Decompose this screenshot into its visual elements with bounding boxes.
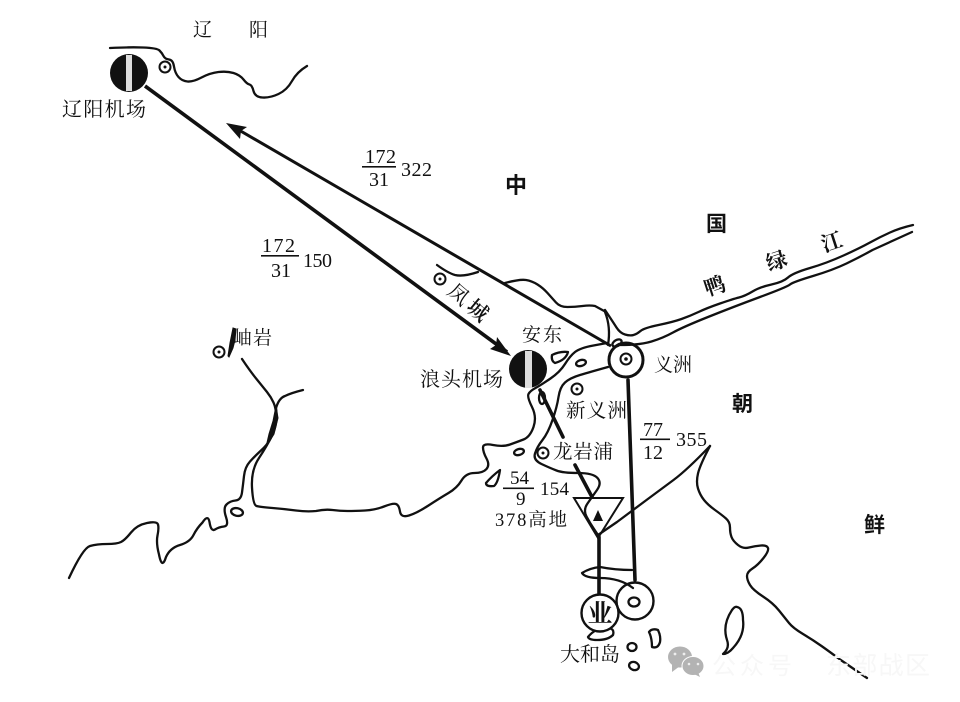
icon: island target: 业 xyxy=(587,600,613,628)
river: Liaoyang xyxy=(110,47,307,98)
label: China 国: 国 xyxy=(706,213,727,236)
label: sortie 172/31 322 xyxy=(362,146,432,191)
label: Korea 朝: 朝 xyxy=(732,393,753,416)
route: river mouth to Longyanpu xyxy=(540,390,563,437)
icon: Liaoyang airport xyxy=(110,54,148,92)
label: sortie 172/31 322: 322 xyxy=(401,159,432,181)
label: sortie 77/12 355: 77 xyxy=(643,419,663,441)
islands xyxy=(486,338,743,671)
river: Xiuyan branch and estuary xyxy=(69,359,303,578)
label: Yalu river: 江 xyxy=(818,228,846,257)
label: Langtou airport: 浪头机场 xyxy=(420,368,503,391)
icon: island target xyxy=(582,594,618,632)
label: Xiuyan: 岫岩 xyxy=(233,327,272,349)
label: Yalu river: 鸭 xyxy=(701,272,729,301)
icon: Yizhou target xyxy=(609,343,643,377)
label: sortie 172/31 150: 172 xyxy=(262,235,295,257)
label: sortie 77/12 355: 355 xyxy=(676,429,707,451)
route: Yizhou to island xyxy=(628,380,635,580)
label: China 中: 中 xyxy=(505,173,527,198)
label: Liaoyang: 辽 xyxy=(193,19,212,41)
label: sortie 172/31 150: 150 xyxy=(303,250,332,272)
icon: Liaoyang city xyxy=(160,62,170,72)
label: Fengcheng: 城 xyxy=(462,295,493,327)
label: Liaoyang: 阳 xyxy=(249,19,268,41)
label: Xiuyan xyxy=(228,327,272,357)
route: Langtou to Liaoyang with arrow xyxy=(226,123,611,346)
label: Korea 鲜: 鲜 xyxy=(864,514,885,537)
icon: Xinyizhou city xyxy=(572,384,582,394)
coastline: west of Yalu mouth xyxy=(252,343,607,516)
label: sortie 172/31 150 xyxy=(261,235,332,282)
watermark xyxy=(668,646,930,680)
icon: Langtou airport xyxy=(509,350,547,388)
icon: chat bubbles xyxy=(668,646,704,677)
label: Liaoyang airport: 辽阳机场 xyxy=(62,98,146,121)
Yalu river xyxy=(605,225,913,345)
label: Longyanpu: 龙岩浦 xyxy=(553,441,613,463)
label: sortie 172/31 322: 172 xyxy=(365,146,396,168)
label: Hill 378: 378高地 xyxy=(495,510,567,531)
label: Andong: 安东 xyxy=(522,324,562,346)
label: sortie 172/31 150: 31 xyxy=(271,260,291,282)
icon: Xiuyan city xyxy=(214,346,224,358)
coastline: Korea west coast xyxy=(697,446,867,678)
label: sortie 54/9 154: 54 xyxy=(510,468,530,489)
watermark: 东部战区 xyxy=(826,652,930,680)
icon: island circle xyxy=(616,582,654,620)
label: sortie 77/12 355: 12 xyxy=(643,442,663,464)
icon: Longyanpu city xyxy=(538,448,548,458)
label: Xinyizhou: 新义洲 xyxy=(566,400,627,422)
label: Yalu river: 绿 xyxy=(763,247,791,276)
river: Fengcheng tributary xyxy=(437,265,609,345)
coastline: east bank of the Yalu mouth xyxy=(535,367,710,535)
icon: 378 height triangle xyxy=(574,498,623,538)
route: triangle to island xyxy=(597,537,601,595)
label: sortie 172/31 322: 31 xyxy=(369,169,389,191)
label: Fengcheng xyxy=(443,279,493,327)
label: Yalu river xyxy=(701,228,846,301)
route: Longyanpu to triangle xyxy=(575,465,592,497)
route: Liaoyang to Langtou with arrow xyxy=(145,86,511,356)
label: Yizhou: 义洲 xyxy=(654,354,692,376)
label: sortie 54/9 154 xyxy=(503,468,570,510)
label: sortie 54/9 154: 9 xyxy=(516,489,526,510)
label: Dahe island: 大和岛 xyxy=(560,643,620,666)
watermark: 公众号 xyxy=(712,653,792,680)
label: Fengcheng: 凤 xyxy=(443,279,474,311)
label: Liaoyang xyxy=(193,19,268,41)
label: sortie 54/9 154: 154 xyxy=(540,479,570,500)
label: sortie 77/12 355 xyxy=(640,419,707,464)
icon: Fengcheng city xyxy=(434,274,446,284)
